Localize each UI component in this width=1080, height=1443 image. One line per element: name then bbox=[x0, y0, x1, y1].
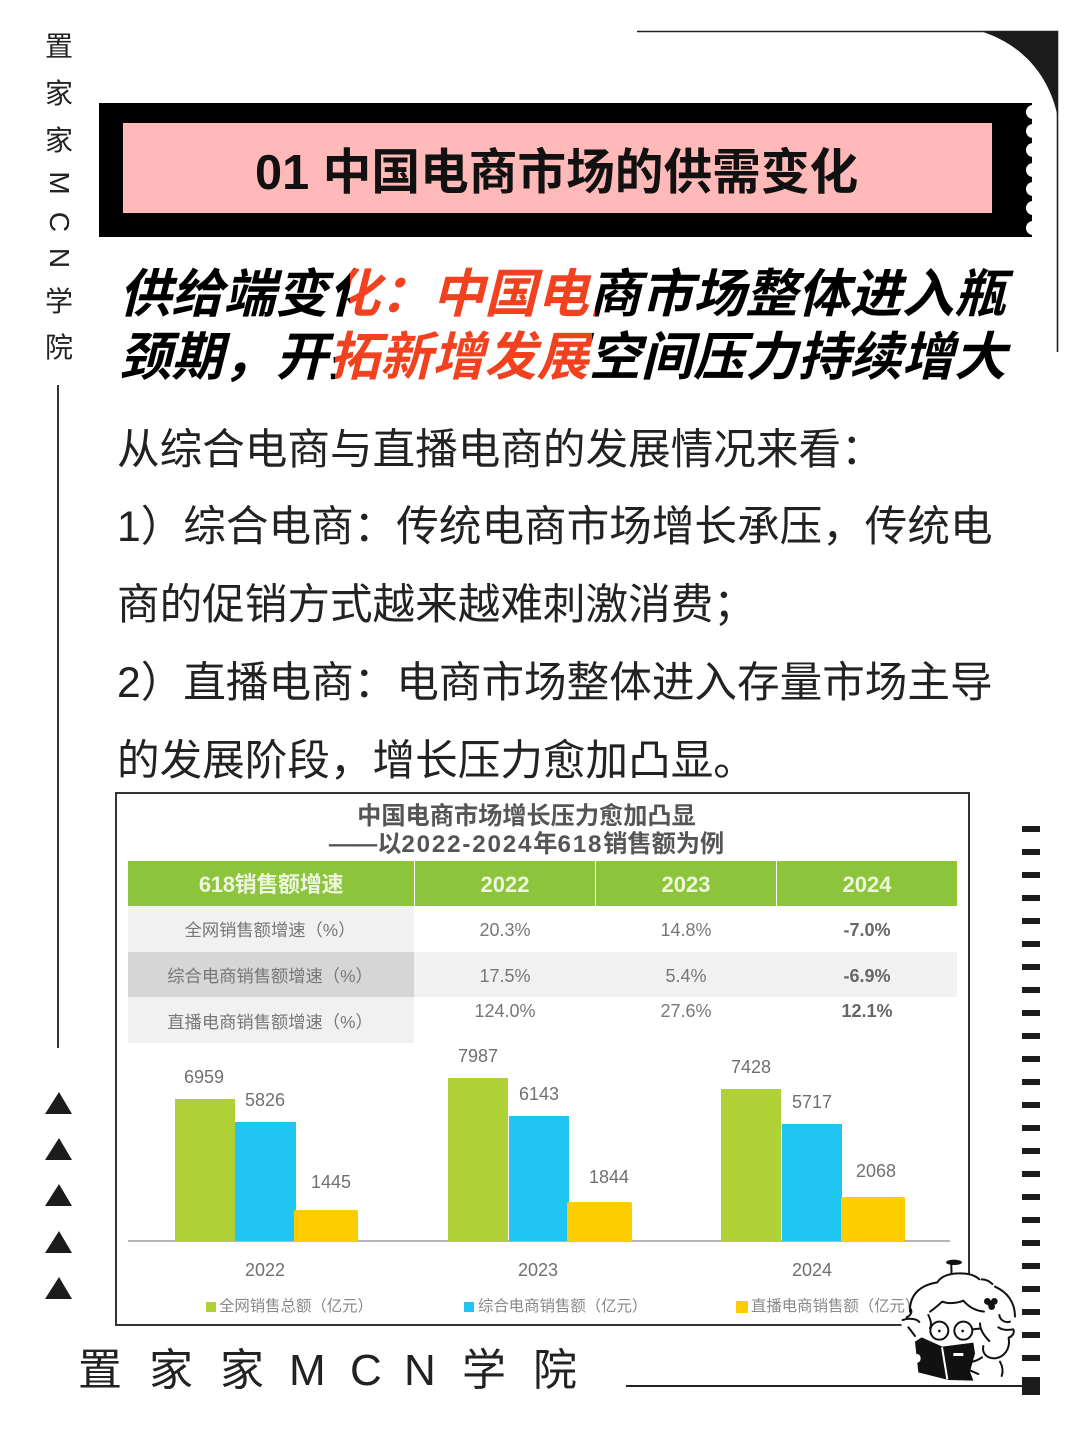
footer brand text bbox=[78, 1346, 577, 1395]
vertical brand text: 家 bbox=[45, 125, 73, 156]
table header: 2024 bbox=[843, 872, 891, 897]
footer brand text: C bbox=[350, 1346, 382, 1395]
chart legend bbox=[206, 1298, 920, 1315]
vertical brand text: 学 bbox=[45, 286, 73, 317]
footer brand text: N bbox=[404, 1346, 436, 1395]
x labels: 2022 bbox=[245, 1260, 285, 1280]
right dashed scale bbox=[1022, 826, 1040, 1395]
bars 2024: 7428 bbox=[731, 1057, 771, 1077]
table header bbox=[128, 861, 957, 906]
axis bbox=[128, 1240, 950, 1242]
footer brand text: 院 bbox=[533, 1346, 577, 1395]
footer brand text: 家 bbox=[220, 1346, 264, 1395]
heading bbox=[119, 266, 1014, 387]
chart title: 中国电商市场增长压力愈加凸显 bbox=[357, 803, 696, 830]
bars 2023: 1844 bbox=[589, 1167, 629, 1187]
chart legend: 全网销售总额（亿元） bbox=[219, 1298, 373, 1315]
bars 2022 bbox=[175, 1067, 358, 1242]
bars 2024: 5717 bbox=[792, 1092, 832, 1112]
vertical brand text: 院 bbox=[45, 332, 73, 363]
vertical brand text: C bbox=[44, 212, 75, 232]
bars 2023: 7987 bbox=[458, 1046, 498, 1066]
title banner bbox=[99, 103, 1032, 237]
body text bbox=[117, 426, 993, 785]
icon: mascot reading a book bbox=[901, 1260, 1016, 1381]
table rows: 全网销售额增速（%） bbox=[185, 920, 355, 940]
chart legend: 综合电商销售额（亿元） bbox=[478, 1298, 647, 1315]
bars 2024: 2068 bbox=[856, 1161, 896, 1181]
bottom line bbox=[626, 1385, 1023, 1387]
footer brand text: M bbox=[289, 1346, 326, 1395]
table rows: 124.0% bbox=[474, 1001, 536, 1021]
bars 2022: 1445 bbox=[311, 1172, 351, 1192]
footer brand text: 家 bbox=[149, 1346, 193, 1395]
heading: 供给端变化：中国电商市场整体进入瓶 bbox=[119, 266, 1006, 324]
heading: 颈期，开拓新增发展空间压力持续增大 bbox=[119, 329, 1006, 387]
table rows: 直播电商销售额增速（%） bbox=[167, 1012, 373, 1032]
book bbox=[915, 1337, 975, 1381]
vertical brand text bbox=[44, 31, 75, 363]
table header: 618销售额增速 bbox=[199, 872, 343, 897]
vertical brand text: N bbox=[44, 248, 75, 268]
table rows: 综合电商销售额增速（%） bbox=[167, 966, 373, 986]
chart title: ——以2022-2024年618销售额为例 bbox=[329, 831, 724, 858]
footer brand text: 学 bbox=[462, 1346, 506, 1395]
leaf and flower bbox=[938, 1260, 998, 1332]
bars 2023: 6143 bbox=[519, 1084, 559, 1104]
table rows: 20.3% bbox=[479, 920, 531, 940]
x labels bbox=[245, 1260, 832, 1280]
vertical brand text: 置 bbox=[45, 31, 73, 62]
vertical brand text: 家 bbox=[45, 78, 73, 109]
body text: 的发展阶段，增长压力愈加凸显。 bbox=[117, 737, 756, 785]
left vertical line bbox=[57, 385, 59, 1048]
panel: chart card bbox=[115, 792, 970, 1326]
bars 2024 bbox=[721, 1057, 905, 1242]
decorative corner frame bbox=[637, 30, 1058, 352]
table header: 2022 bbox=[481, 872, 529, 897]
footer brand text: 置 bbox=[78, 1346, 122, 1395]
title: 01 中国电商市场的供需变化 bbox=[255, 146, 858, 200]
table rows: 5.4% bbox=[665, 966, 707, 986]
table rows: 17.5% bbox=[479, 966, 531, 986]
x labels: 2024 bbox=[792, 1260, 832, 1280]
table rows bbox=[167, 920, 893, 1032]
vertical brand text: M bbox=[44, 171, 75, 195]
table rows: -6.9% bbox=[843, 966, 891, 986]
bars 2022: 5826 bbox=[245, 1090, 285, 1110]
triangle markers bbox=[45, 1092, 72, 1299]
x labels: 2023 bbox=[518, 1260, 558, 1280]
table rows: 12.1% bbox=[841, 1001, 893, 1021]
body text: 1）综合电商：传统电商市场增长承压，传统电 bbox=[117, 503, 993, 551]
body text: 从综合电商与直播电商的发展情况来看： bbox=[117, 426, 884, 474]
body text: 商的促销方式越来越难刺激消费； bbox=[117, 581, 756, 629]
data table bbox=[128, 906, 957, 1043]
chart title bbox=[328, 802, 724, 858]
table rows: 27.6% bbox=[660, 1001, 712, 1021]
chart legend: 直播电商销售额（亿元） bbox=[751, 1298, 920, 1315]
table header: 2023 bbox=[662, 872, 710, 897]
bar chart bbox=[128, 1046, 950, 1280]
table rows: 14.8% bbox=[660, 920, 712, 940]
bars 2023 bbox=[448, 1046, 632, 1242]
body text: 2）直播电商：电商市场整体进入存量市场主导 bbox=[117, 659, 993, 707]
bars 2022: 6959 bbox=[184, 1067, 224, 1087]
table rows: -7.0% bbox=[843, 920, 891, 940]
